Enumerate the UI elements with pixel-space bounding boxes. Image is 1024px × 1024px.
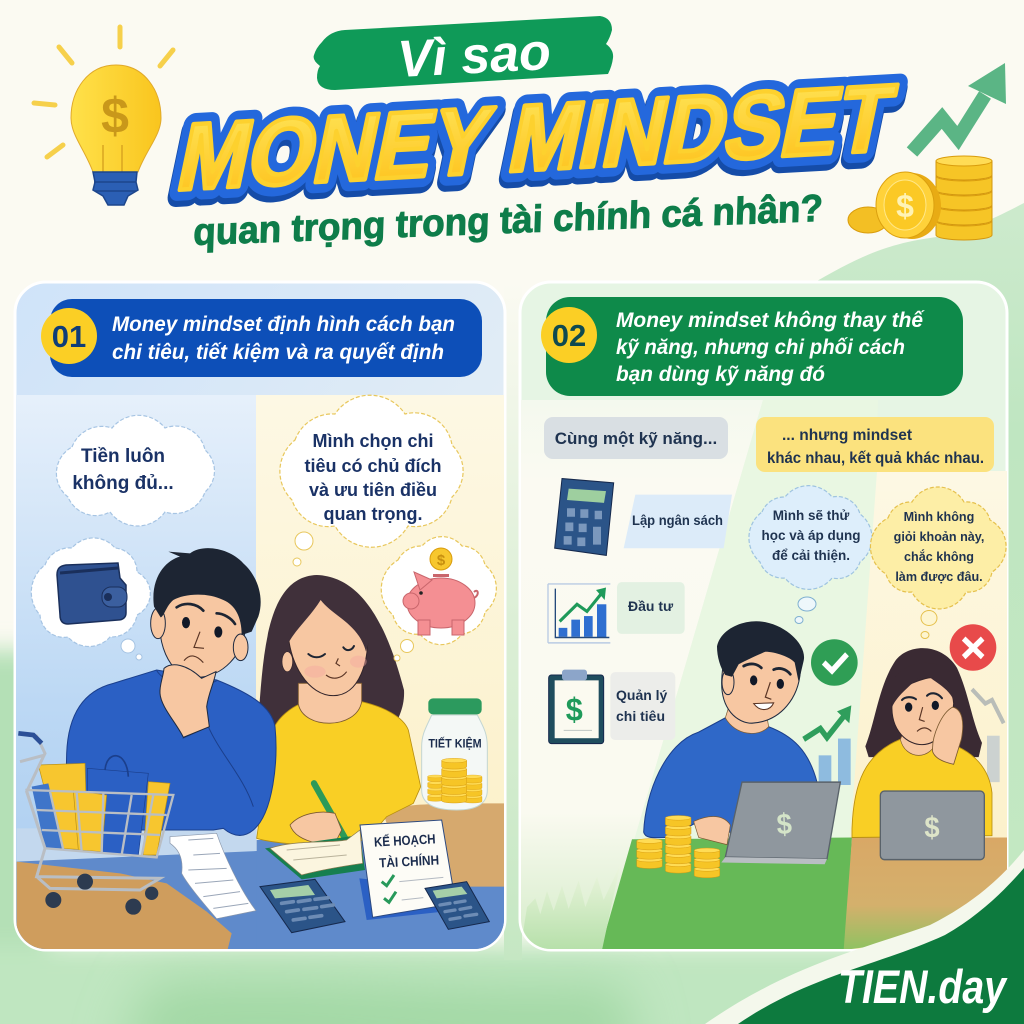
icon: red cross (950, 624, 996, 671)
thought bubble: intentional spending: quan trọng. (324, 504, 422, 524)
header: 01: chi tiêu, tiết kiệm và ra quyết định (112, 341, 444, 364)
subtitle: quan trọng trong tài chính cá nhân? (193, 188, 824, 254)
thought bubble: fixed mindset (870, 487, 1006, 638)
thought bubble: growth mindset: để cải thiện. (772, 548, 850, 563)
thought bubble: money never enough: không đủ... (72, 473, 174, 494)
skill label: investing: Đầu tư (628, 598, 674, 614)
icon: chart (548, 584, 610, 643)
panel: 02 skills and mindset (520, 282, 1024, 1024)
title: Vì sao pill (314, 16, 613, 90)
icon: lightbulb with dollar: $ (101, 88, 129, 144)
skill label: budgeting: Lập ngân sách (632, 512, 723, 528)
calculators (260, 879, 489, 933)
label: different mindset: khác nhau, kết quả khác nhau. (767, 450, 984, 467)
thought bubble: intentional spending: tiêu có chủ đích (304, 456, 442, 476)
icon: calculator (555, 479, 614, 555)
thought bubble: intentional spending (280, 395, 463, 566)
icon: wallet (57, 563, 127, 624)
notebook (265, 830, 365, 879)
woman with laptop (852, 648, 992, 860)
clipboard: financial plan: TÀI CHÍNH (379, 852, 439, 871)
chip background: budgeting (624, 495, 732, 548)
scene: table and shopping, worried man, planning woman (17, 548, 507, 953)
thought bubble: growth mindset (749, 486, 872, 624)
thought bubble: growth mindset: Mình sẽ thử (773, 508, 849, 523)
icon: gold coins: $ (896, 188, 914, 224)
thought bubble: money never enough: Tiền luôn (81, 446, 165, 467)
coins on desk (637, 816, 720, 878)
icon: clipboard (549, 670, 604, 744)
icon: lightbulb with dollar (34, 27, 173, 205)
savings jar (422, 698, 487, 810)
bars and rising arrow (804, 689, 1004, 785)
title: MONEY MINDSET: MONEY MINDSET (169, 70, 902, 216)
icon: rising arrow (912, 63, 1006, 152)
thought bubble: fixed mindset: chắc không (904, 549, 974, 564)
man with laptop (644, 621, 840, 864)
icon: green check (811, 639, 858, 686)
scene: desks, laptops, people (520, 479, 1009, 950)
thought bubble: intentional spending: Mình chọn chi (312, 431, 434, 451)
thought bubble: money never enough (56, 415, 214, 526)
title: Vì sao pill: Vì sao (396, 23, 552, 89)
thought bubble: intentional spending: và ưu tiên điều (309, 480, 437, 500)
label: different mindset (756, 417, 994, 472)
thought bubble: wallet (31, 538, 150, 660)
savings jar: TIẾT KIỆM (428, 736, 482, 751)
header: 02: Money mindset không thay thế (616, 309, 925, 332)
skill label: spending management (616, 690, 668, 721)
title: MONEY MINDSET: MONEY MINDSET (170, 65, 903, 211)
label: same skill (544, 417, 728, 459)
header: 02: kỹ năng, nhưng chi phối cách (616, 336, 905, 359)
label: different mindset: ... nhưng mindset (782, 427, 912, 444)
thought bubble: fixed mindset: giỏi khoản này, (894, 530, 984, 544)
thought bubble: fixed mindset: làm được đâu. (895, 570, 983, 584)
header: 01: Money mindset định hình cách bạn (112, 313, 455, 336)
thought bubble: fixed mindset: Mình không (904, 510, 974, 524)
thought bubble: piggy bank (381, 537, 496, 661)
man with laptop: $ (776, 808, 793, 842)
woman with laptop: $ (924, 812, 940, 845)
header: 02 (541, 297, 963, 396)
chip background: investing (617, 582, 685, 634)
skill label: spending management: Quản lý (616, 687, 668, 703)
title: MONEY MINDSET: MONEY MINDSET (170, 65, 903, 211)
icon: piggy bank: $ (437, 552, 446, 569)
shopping cart (18, 733, 173, 915)
chip background: spending management (610, 672, 675, 740)
header: 01 (41, 299, 482, 377)
woman (257, 575, 421, 845)
brand corner with logo (705, 850, 1024, 1024)
man (65, 548, 276, 835)
icon: gold coins (848, 156, 992, 240)
skill label: spending management: chi tiêu (616, 708, 665, 724)
label: same skill: Cùng một kỹ năng... (555, 429, 717, 448)
thought bubble: growth mindset: học và áp dụng (761, 528, 861, 543)
clipboard: financial plan (359, 820, 458, 920)
header: 02: 02 (552, 318, 586, 353)
receipt (170, 833, 256, 919)
header: 02: bạn dùng kỹ năng đó (616, 363, 825, 386)
icon: clipboard: $ (566, 690, 583, 728)
header: 01: 01 (52, 319, 86, 354)
panel: 01 spending habits (15, 282, 508, 955)
clipboard: financial plan: KẾ HOẠCH (374, 831, 436, 850)
